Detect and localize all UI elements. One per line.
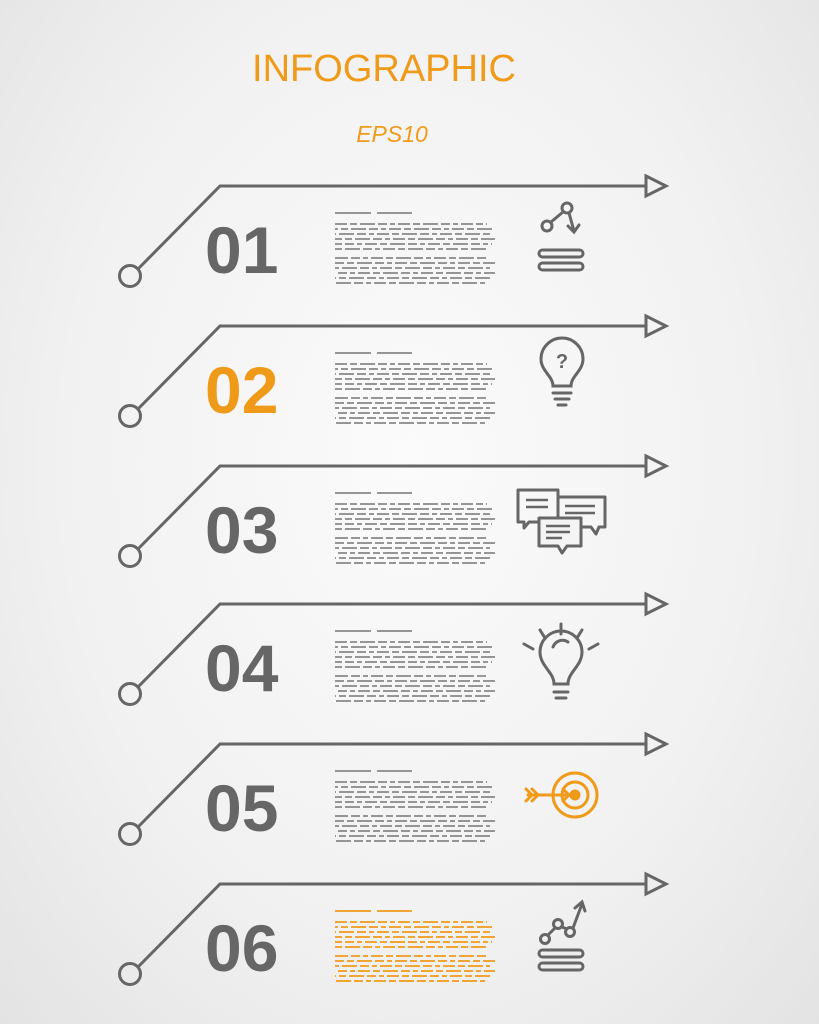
step 06 (120, 874, 666, 985)
number 02: 02 (205, 353, 278, 427)
icon: question bulb: ? (556, 351, 568, 373)
step 02 (120, 316, 666, 427)
number 04: 04 (205, 631, 279, 705)
number 01: 01 (205, 213, 278, 287)
number 05: 05 (205, 771, 278, 845)
number 06: 06 (205, 911, 278, 985)
subtitle: EPS10 (356, 121, 428, 147)
text block 01 (335, 213, 495, 283)
number 03: 03 (205, 493, 278, 567)
text block 03 (335, 493, 495, 563)
icon: rising graph (539, 902, 585, 970)
text block 05 (335, 771, 495, 841)
text block 04 (335, 631, 495, 701)
step 03 (120, 456, 666, 567)
step 04 (120, 594, 666, 705)
step 01 (120, 176, 666, 287)
step 05 (120, 734, 666, 845)
icon: target with arrow (526, 773, 597, 817)
icon: chat bubbles (518, 490, 605, 553)
text block 06 (335, 911, 495, 981)
text block 02 (335, 353, 495, 423)
icon: shining bulb (524, 624, 598, 698)
title: INFOGRAPHIC (252, 48, 516, 90)
icon: question bulb (541, 338, 583, 405)
icon: graph with arrow (539, 203, 583, 270)
